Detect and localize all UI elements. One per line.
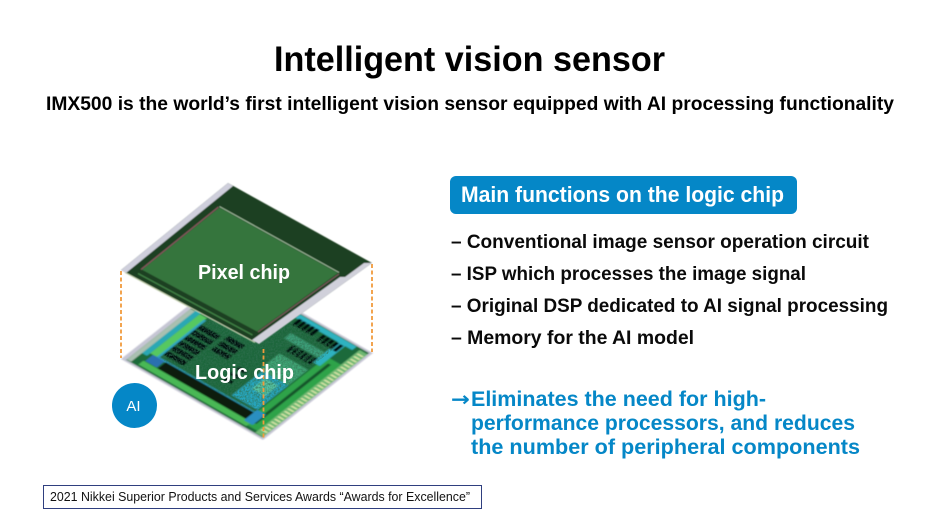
award note [44,486,482,508]
conclusion callout: performance processors, and reduces [471,412,855,435]
function list: – ISP which processes the image signal [451,264,806,285]
memory blocks [163,288,345,411]
AI badge [112,383,157,428]
function list: – Original DSP dedicated to AI signal processing [451,296,888,317]
function list: – Memory for the AI model [451,328,694,349]
conclusion callout: Eliminates the need for high- [471,388,766,411]
title: Intelligent vision sensor [274,40,665,79]
function list: – Conventional image sensor operation circuit [451,232,870,253]
chip diagram [121,183,373,440]
bond pads [261,353,364,433]
conclusion callout: the number of peripheral components [471,436,860,459]
logic chip [121,272,373,440]
pixel chip [121,183,372,344]
AI badge: AI [126,398,141,415]
subtitle: IMX500 is the world’s first intelligent vision sensor equipped with AI processing functionality [46,93,894,115]
award note: 2021 Nikkei Superior Products and Services Awards “Awards for Excellence” [50,489,470,504]
conclusion callout [451,387,860,459]
panel: main functions heading: Main functions on the logic chip [461,182,784,207]
conclusion callout: → [451,387,470,411]
label: logic chip: Logic chip [195,362,294,384]
panel: main functions heading [450,176,797,214]
function list [451,232,888,349]
connector lines [121,264,372,438]
label: pixel chip: Pixel chip [198,262,290,284]
